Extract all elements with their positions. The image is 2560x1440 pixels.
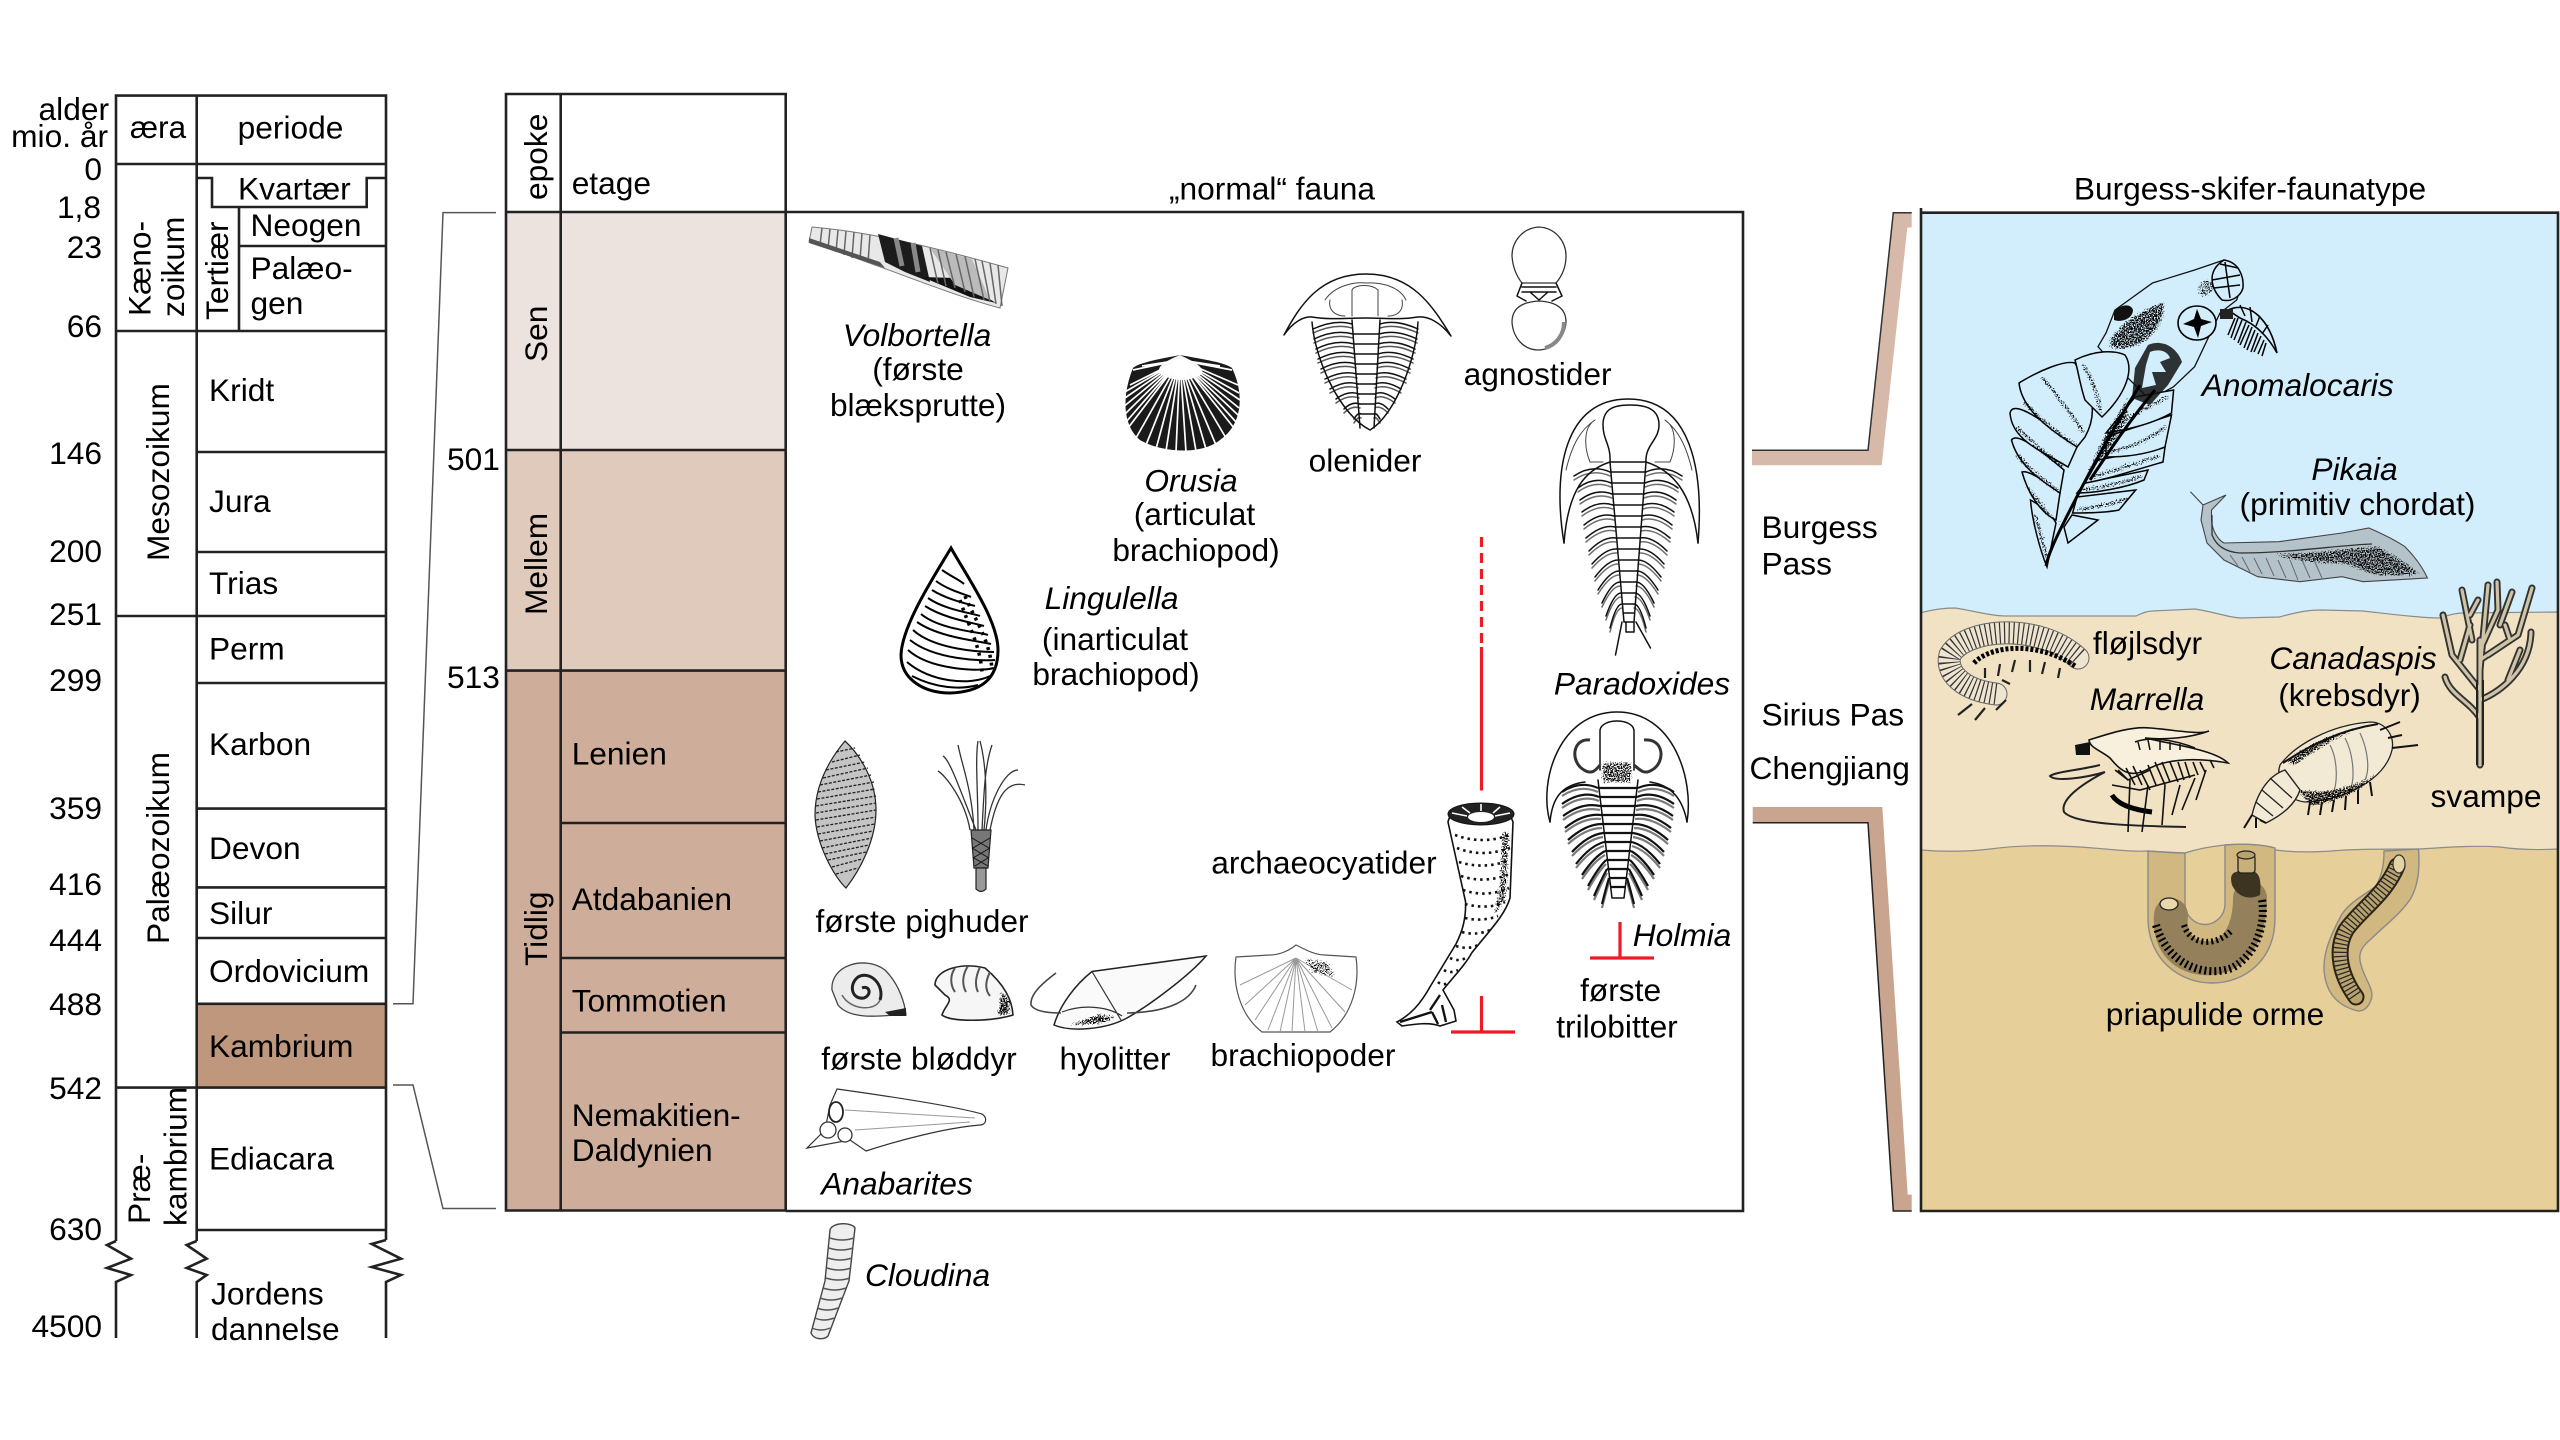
epoch labels: Sen [518,306,554,362]
period labels: Jura [209,483,271,519]
fossil: agnostider [1512,227,1566,350]
label: Volbortella: Volbortella [843,317,991,353]
fossil: Lingulella [901,548,998,693]
period labels: Palæo- [250,250,353,286]
label: Burgess Pass: Burgess [1762,509,1878,545]
fossil: sponges [2443,582,2532,765]
fossil: snail mollusc [832,963,906,1016]
age axis labels [11,91,109,1344]
period labels: Kridt [209,372,274,408]
period labels: Kambrium [209,1028,353,1064]
label: brachiopoder: brachiopoder [1211,1037,1396,1073]
label: Burgess Pass: Pass [1762,546,1832,582]
age axis labels: 1,8 [57,189,101,225]
panel: geologic time scale [11,91,401,1347]
label: Pikaia: Pikaia [2311,451,2398,487]
fossil: Cloudina [811,1224,855,1339]
fossil: priapulid worm in U burrow [2156,851,2263,971]
period labels: dannelse [211,1311,340,1347]
burrow: U-shaped [2148,844,2275,983]
label: agnostider: agnostider [1464,356,1612,392]
fossil: Paradoxides trilobite [1560,399,1699,655]
label: hyolitter: hyolitter [1060,1040,1171,1076]
period labels: Trias [209,565,278,601]
label: Paradoxides: Paradoxides [1554,666,1730,702]
fossil: priapulid worm in S burrow [2340,855,2405,997]
label: Orusia: brachiopod) [1112,532,1280,568]
fossil: cystoid echinoderm [815,741,876,888]
age axis labels: 23 [67,229,102,265]
era labels: Palæozoikum [140,752,176,944]
age axis labels: 0 [84,151,102,187]
label: første trilobitter: trilobitter [1556,1009,1678,1045]
label: Canadaspis: Canadaspis [2269,640,2437,676]
label: første pighuder: første pighuder [815,903,1029,939]
age axis labels: alder [39,91,109,127]
fossil: Canadaspis [2244,722,2418,828]
label: Cloudina: Cloudina [865,1257,990,1293]
era labels: Kæno- [122,221,158,316]
period labels: Silur [209,895,273,931]
stage labels: etage [572,165,651,201]
body lobes [2010,352,2174,567]
age axis labels: 542 [49,1070,102,1106]
label: første trilobitter: første [1580,972,1661,1008]
label: Canadaspis: (krebsdyr) [2278,677,2421,713]
water [1921,213,2558,623]
connector band: Chengjiang [1753,807,1912,1211]
age axis labels: 200 [49,533,102,569]
fossil: Orusia [1122,355,1240,452]
label: første bløddyr: første bløddyr [821,1040,1017,1076]
heading: normal fauna: „normal“ fauna [1169,170,1375,206]
era labels: Mesozoikum [140,383,176,561]
label: Orusia: Orusia [1144,463,1238,499]
range end bar: archaeocyatider [1451,996,1515,1032]
frame [1921,208,2558,1211]
label: første trilobitter [1556,972,1678,1045]
age axis labels: 66 [67,308,102,344]
head appendage base [2212,260,2243,300]
panel: Cambrian epochs and stages [506,94,786,1211]
range end bar: trilobites [1590,922,1654,958]
label: Burgess Pass [1762,509,1878,582]
zoom connector lines from Kambrium [393,213,496,1209]
fossil: velvet worm [1949,633,2078,720]
table lines [107,96,401,1338]
head and carapace [2098,260,2243,400]
panel: Burgess Shale habitat [1921,208,2558,1211]
fossil: Anomalocaris [2010,260,2277,567]
age axis labels: 630 [49,1211,102,1247]
period labels: Devon [209,830,301,866]
age axis labels: 416 [49,866,102,902]
stage table lines [506,94,786,1210]
fossil: brachiopod [1235,945,1357,1032]
label: fløjlsdyr: fløjlsdyr [2093,625,2203,661]
age axis labels: mio. år [11,118,108,154]
stage labels: Tommotien [572,982,727,1018]
period labels [199,110,369,1347]
label: Lingulella: (inarticulat [1042,621,1188,657]
period labels: Perm [209,630,285,666]
era labels: Præ- [121,1154,157,1224]
stage labels [572,165,741,1168]
label: Holmia: Holmia [1633,917,1731,953]
panel: normal fauna [786,212,1743,1339]
age axis labels: 299 [49,662,102,698]
label: Chengjiang: Chengjiang [1750,750,1910,786]
fossil: second mollusc [935,966,1013,1020]
age axis labels: 4500 [32,1308,102,1344]
label: archaeocyatider: archaeocyatider [1211,844,1437,880]
fossil: hyolith [1031,956,1206,1029]
epoch labels: epoke [518,114,554,200]
fossil: Volbortella [809,227,1008,308]
period labels: Ediacara [209,1140,334,1176]
era labels: zoikum [155,217,191,317]
period labels: Neogen [250,207,362,243]
label: Pikaia: (primitiv chordat) [2240,486,2475,522]
stipple shading [2014,362,2170,560]
age axis labels: 444 [49,922,102,958]
fossil: Marrella [2050,728,2228,832]
period labels: Ordovicium [209,953,369,989]
heading: Burgess shale fauna type: Burgess-skifer-faunatype [2074,170,2426,206]
fossil: Anabarites [807,1089,986,1151]
feeding appendage [2228,307,2277,353]
label: Volbortella: (første [872,351,964,387]
range line: trilobites dashed and solid [1480,537,1483,790]
stage labels: Lenien [572,736,667,772]
label: Anabarites: Anabarites [819,1166,973,1202]
label: Lingulella: Lingulella [1045,580,1179,616]
fossil: Holmia trilobite [1547,712,1688,908]
label: Lingulella: brachiopod) [1032,656,1200,692]
age label 513: 513 [447,659,500,695]
label: Lingulella [1032,580,1200,692]
period labels: periode [238,110,343,146]
epoch labels: Mellem [518,513,554,615]
panel frame [786,212,1743,1211]
Kambrium highlight [197,1004,386,1088]
label: svampe: svampe [2431,778,2541,814]
label: Canadaspis [2269,640,2437,713]
age axis labels: 146 [49,435,102,471]
connector band: Burgess Pass [1752,213,1912,465]
period labels: Tertiær [199,221,235,320]
label: Marrella: Marrella [2090,681,2204,717]
epoch fills [506,212,786,1211]
stage labels: Daldynien [572,1132,713,1168]
age axis labels: 251 [49,596,102,632]
stage labels: Atdabanien [572,881,732,917]
era labels: æra [130,109,187,145]
label: Volbortella [830,317,1006,423]
label: olenider: olenider [1309,443,1422,479]
label: Volbortella: blæksprutte) [830,387,1006,423]
period labels: gen [250,285,303,321]
label: Pikaia [2240,451,2475,522]
label: Orusia [1112,463,1280,568]
upper sediment [1921,608,2558,870]
era labels [121,109,194,1226]
burrow: S-shaped [2324,849,2419,1011]
fossil: archaeocyatider [1397,803,1514,1026]
epoch labels [518,114,554,966]
lower sediment [1921,844,2558,1211]
label: priapulide orme: priapulide orme [2106,996,2324,1032]
fossil: feathered echinoderm [938,741,1025,892]
period labels: Jordens [211,1276,324,1312]
fossil: olenider trilobite [1284,274,1451,430]
label: Sirius Pas: Sirius Pas [1762,696,1904,732]
age label 501: 501 [447,441,500,477]
fossil: Pikaia [2190,492,2427,582]
age axis labels: 359 [49,790,102,826]
age axis labels: 488 [49,986,102,1022]
label: Anomalocaris: Anomalocaris [2200,367,2394,403]
period labels: Kvartær [238,171,351,207]
stage labels: Nemakitien- [572,1097,741,1133]
period labels: Karbon [209,726,311,762]
label: Orusia: (articulat [1134,496,1255,532]
epoch labels: Tidlig [518,891,554,966]
era labels: kambrium [158,1087,194,1226]
